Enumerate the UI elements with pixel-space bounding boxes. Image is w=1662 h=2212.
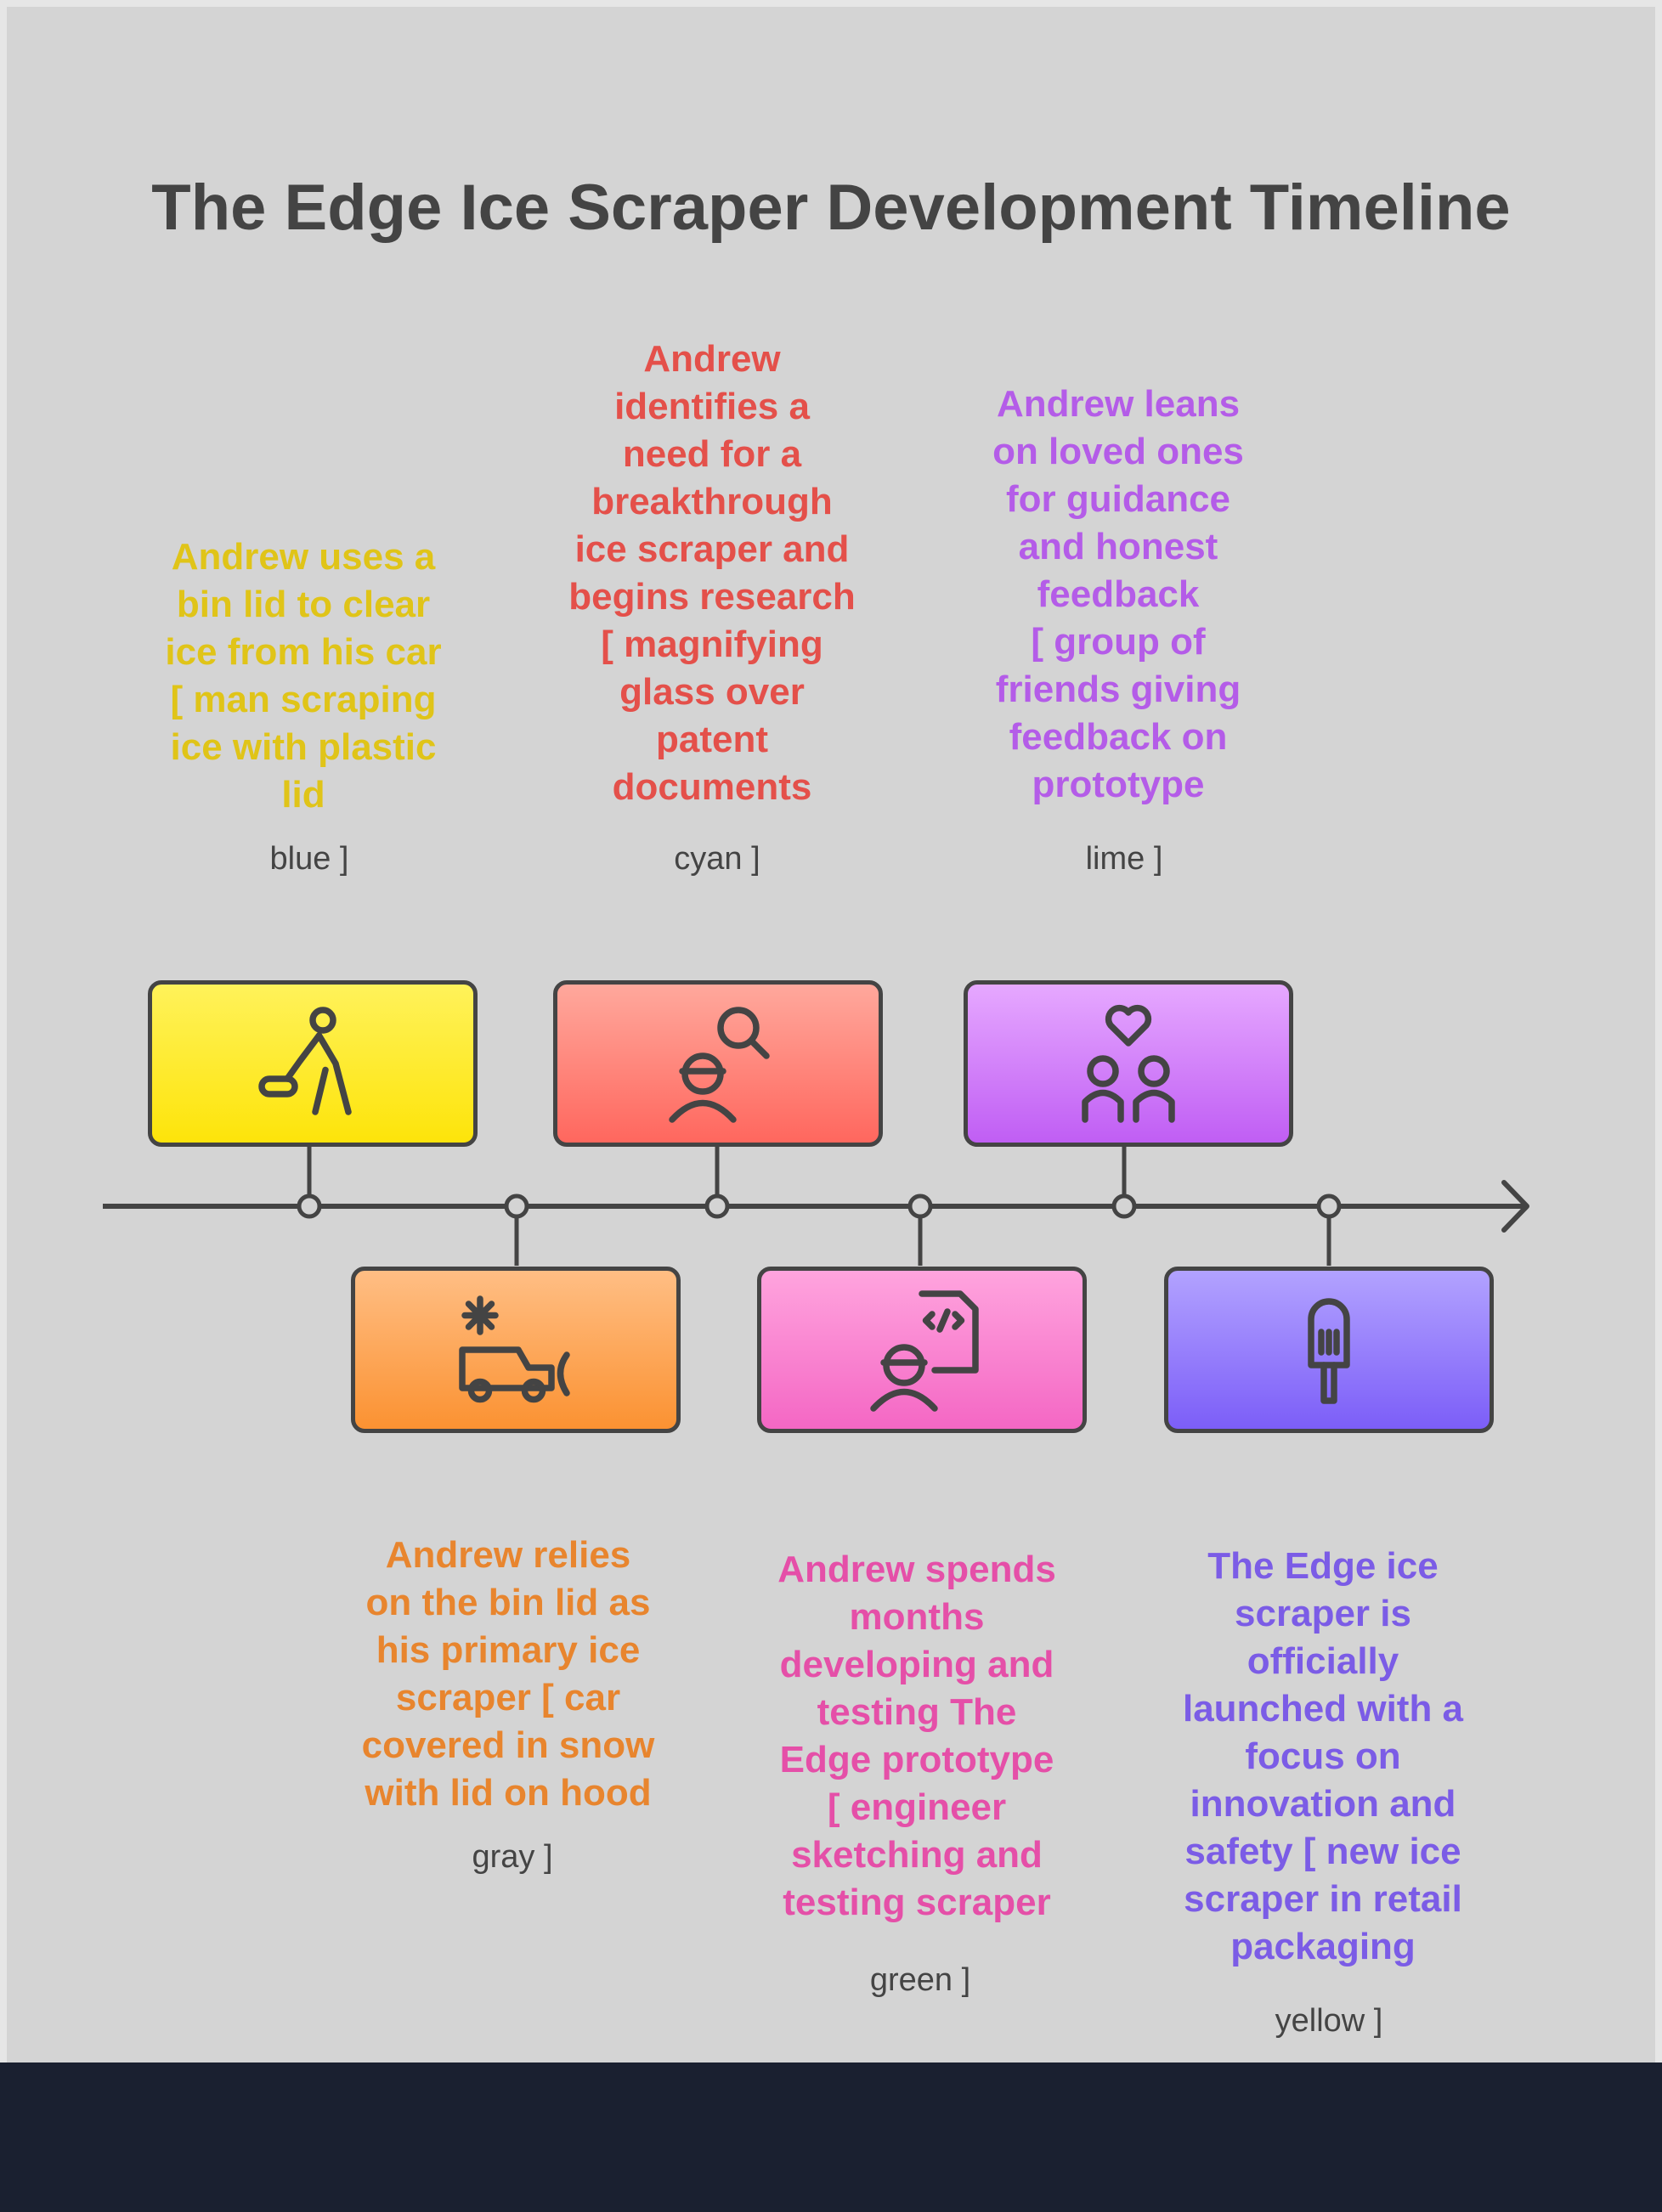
text 2: scraper [ car [396, 1677, 620, 1718]
text 2 [362, 1534, 654, 1814]
icon: car with snowflake [459, 1295, 570, 1403]
text 1: Andrew uses a [172, 536, 435, 578]
text 3: patent [656, 719, 768, 760]
text 1 [165, 536, 442, 815]
icon: friends with heart [1082, 1004, 1175, 1123]
text 5: Andrew leans [997, 383, 1240, 425]
title: The Edge Ice Scraper Development Timeline [151, 172, 1511, 244]
icon: engineer with document [870, 1290, 979, 1412]
label 3: cyan ] [674, 841, 760, 877]
box 4: engineer coding [757, 1267, 1087, 1433]
icon: engineer with magnifier [669, 1007, 770, 1123]
icon: scraper package [1308, 1298, 1350, 1404]
text 2: with lid on hood [365, 1772, 652, 1814]
text 1: ice with plastic [170, 726, 436, 768]
text 5: and honest [1019, 526, 1218, 567]
text 6: safety [ new ice [1184, 1831, 1461, 1872]
text 4: Edge prototype [780, 1739, 1054, 1780]
icon: man scraping [258, 1007, 352, 1115]
box 3: magnifying glass [553, 980, 883, 1147]
text 4: sketching and [791, 1834, 1043, 1876]
text 1: lid [281, 774, 325, 815]
text 5: feedback [1037, 573, 1199, 615]
text 3: identifies a [614, 386, 810, 427]
text 2: covered in snow [362, 1724, 654, 1766]
text 1: [ man scraping [171, 679, 436, 720]
text 6: innovation and [1190, 1783, 1456, 1825]
box 6: ice scraper [1164, 1267, 1494, 1433]
text 4: [ engineer [828, 1786, 1006, 1828]
text 3 [568, 338, 856, 808]
box 1: man scraping [148, 980, 478, 1147]
text 6: packaging [1230, 1926, 1416, 1967]
text 3: need for a [623, 433, 801, 475]
label 1: blue ] [270, 841, 348, 877]
text 4: Andrew spends [777, 1549, 1056, 1590]
text 6: launched with a [1183, 1688, 1463, 1730]
box 5: friends [964, 980, 1293, 1147]
text 5 [992, 383, 1244, 805]
text 4: developing and [780, 1644, 1054, 1685]
text 6 [1183, 1545, 1463, 1967]
text 5: feedback on [1009, 716, 1227, 758]
text 1: ice from his car [165, 631, 442, 673]
text 6: officially [1247, 1640, 1399, 1682]
text 4 [777, 1549, 1056, 1923]
text 3: Andrew [643, 338, 781, 380]
text 2: his primary ice [376, 1629, 640, 1671]
text 5: friends giving [996, 669, 1241, 710]
text 3: breakthrough [591, 481, 833, 522]
text 4: months [850, 1596, 984, 1638]
box 2: car in snow [351, 1267, 681, 1433]
label 6: yellow ] [1275, 2003, 1382, 2039]
text 6: scraper is [1235, 1593, 1411, 1634]
text 6: scraper in retail [1184, 1878, 1462, 1920]
label 5: lime ] [1086, 841, 1162, 877]
text 5: [ group of [1031, 621, 1206, 663]
text 3: begins research [568, 576, 856, 618]
text 5: prototype [1032, 764, 1204, 805]
text 6: focus on [1245, 1735, 1401, 1777]
text 3: [ magnifying [601, 624, 823, 665]
text 5: on loved ones [992, 431, 1244, 472]
text 3: ice scraper and [575, 528, 849, 570]
text 1: bin lid to clear [177, 584, 430, 625]
text 4: testing The [817, 1691, 1016, 1733]
text 3: glass over [619, 671, 805, 713]
label 2: gray ] [472, 1839, 553, 1875]
text 4: testing scraper [783, 1882, 1051, 1923]
text 2: Andrew relies [386, 1534, 630, 1576]
text 2: on the bin lid as [366, 1582, 650, 1623]
text 6: The Edge ice [1207, 1545, 1439, 1587]
text 5: for guidance [1006, 478, 1230, 520]
label 4: green ] [870, 1962, 970, 1998]
text 3: documents [613, 766, 811, 808]
